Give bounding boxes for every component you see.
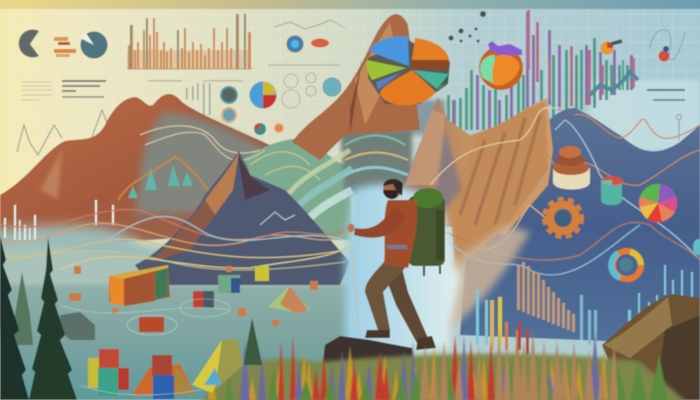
block pyramid cluster [132, 355, 196, 399]
orange gear [544, 199, 582, 237]
teal mini chart in left mountain [118, 126, 320, 200]
middle pie and donut icons [221, 73, 341, 135]
hiker figure [348, 179, 445, 350]
backpack [408, 188, 445, 276]
contour lines over terrain [0, 209, 350, 270]
olive meadow base [200, 354, 690, 400]
icon: teal circle [323, 78, 341, 96]
central dark mountain [135, 151, 350, 285]
green slice [367, 60, 406, 80]
tall multicolour bar chart [447, 10, 638, 130]
ring chart [611, 251, 641, 279]
diagonal sandy slope [425, 225, 530, 335]
trekking pole [350, 226, 359, 334]
icon: dark pie [19, 30, 39, 58]
waist belt [387, 245, 407, 249]
orange bottom slice [380, 70, 436, 105]
gray bars behind left mountain [186, 83, 210, 115]
pie chart large [367, 36, 450, 105]
white bars left [4, 200, 114, 240]
green block group [218, 275, 240, 293]
teal slice [413, 70, 449, 89]
rock under hiker [322, 336, 415, 385]
teal blob right edge [693, 239, 700, 255]
icon: floating small pie [600, 41, 622, 54]
mountain gray right slope [135, 112, 265, 215]
head [383, 179, 403, 199]
right rock ridge [402, 97, 553, 270]
icon: blue globe [287, 36, 303, 52]
grass blades [208, 330, 668, 400]
trees [0, 235, 77, 400]
small sky elements [448, 11, 686, 140]
thin line sparks [17, 125, 62, 155]
ground plain [0, 268, 350, 400]
green wave mountain band [245, 139, 352, 240]
central-right slate terrain [460, 108, 700, 345]
arm [354, 205, 405, 238]
slate bands under tall mountain [340, 130, 412, 195]
small 3d pie [479, 41, 523, 90]
orange bar chart [127, 14, 252, 69]
colorful wave bands mid [0, 225, 350, 330]
slate grid under big pie [340, 100, 445, 135]
red block [193, 291, 214, 308]
lower right bar chart [476, 265, 693, 360]
right sky panel lower [590, 80, 700, 150]
yellow-green ramp [192, 339, 243, 393]
hand [348, 224, 354, 232]
icon: slate pie [80, 32, 108, 58]
block cluster left [88, 349, 129, 396]
ground contour rings [60, 299, 230, 395]
rock streaks [460, 115, 540, 225]
short label bars [647, 89, 685, 91]
icon: orange blob [311, 38, 329, 48]
back leg [383, 260, 428, 345]
icon: four colour pie [250, 82, 276, 108]
icon: small orange ring [274, 123, 284, 133]
dark tree right [29, 237, 77, 400]
pin [676, 114, 682, 140]
pyramid [268, 286, 310, 314]
small tree [244, 318, 262, 365]
front leg [365, 258, 405, 330]
teal cylinder [601, 176, 623, 205]
left red mountain [0, 94, 300, 250]
blue slice [370, 36, 409, 66]
dark tree left [0, 235, 29, 400]
yellow block [255, 266, 269, 281]
icon: orange ring [222, 108, 236, 122]
pie rim shadow [368, 40, 450, 104]
brown fading bar chart [517, 262, 575, 332]
colour fan pie [639, 184, 677, 222]
line diagram right [650, 30, 686, 60]
icon: red and blue ball [658, 46, 670, 62]
line diagram [274, 20, 345, 29]
boots [365, 330, 436, 350]
gray hut block [60, 312, 95, 340]
outline circles [282, 73, 316, 108]
top-left chart group: pies and bar legend [19, 30, 108, 58]
stacked copper cylinders [553, 146, 590, 190]
icon: small pie [254, 123, 266, 135]
legend rows [22, 80, 243, 100]
large green-orange block [109, 265, 170, 306]
red block 2 [139, 317, 164, 332]
orange top slice [412, 38, 449, 60]
back faded tree [12, 272, 33, 345]
colorful grass meadow [200, 330, 690, 400]
right tall mountain [292, 14, 420, 160]
top-middle small diagrams [268, 20, 345, 65]
scatter dots [448, 11, 486, 42]
small orange blocks [69, 266, 318, 326]
3d blocks on ground [60, 265, 318, 399]
torso [384, 200, 417, 268]
icon: stacked bars [54, 37, 76, 57]
sky behind hiker [345, 184, 460, 348]
right terrain contour lines [430, 108, 700, 275]
icon: donut [221, 87, 237, 103]
right brown hill [602, 294, 700, 400]
sand-toned wave bands [280, 136, 408, 228]
